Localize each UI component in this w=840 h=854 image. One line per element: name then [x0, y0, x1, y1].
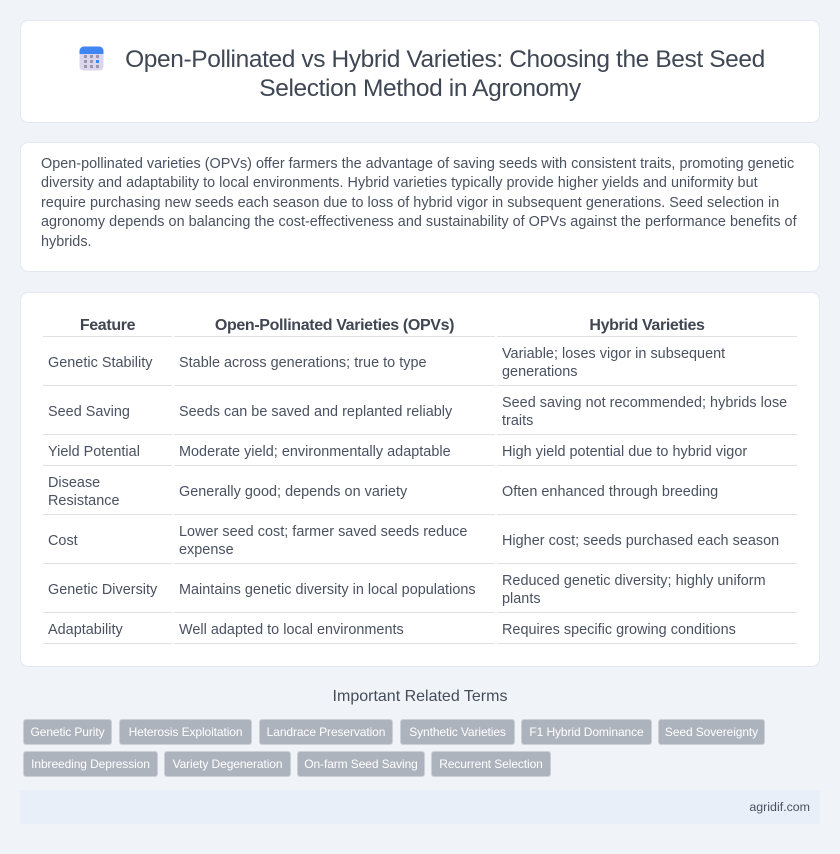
row: Yield Potential	[48, 444, 747, 460]
panel: title header	[20, 20, 820, 123]
row: Yield Potential: Moderate yield; environmentally adaptable	[179, 444, 451, 460]
row: Genetic Diversity: Genetic Diversity	[48, 582, 157, 598]
intro text: diversity and adaptability to local environments. Hybrid varieties typically provide higher yields and uniformity but	[41, 175, 758, 191]
table header: Open-Pollinated Varieties (OPVs)	[215, 317, 454, 334]
row: Genetic Stability: Genetic Stability	[48, 355, 152, 371]
row: Genetic Diversity: Reduced genetic diversity; highly uniform	[502, 573, 766, 589]
row: Disease Resistance: Resistance	[48, 493, 120, 509]
row: Cost: Lower seed cost; farmer saved seeds reduce	[179, 524, 467, 540]
title: Selection Method in Agronomy	[259, 75, 581, 102]
tag list: Inbreeding Depression	[31, 757, 150, 771]
row: Disease Resistance: Often enhanced through breeding	[502, 484, 718, 500]
row: Genetic Diversity: plants	[502, 591, 541, 607]
intro text: require purchasing new seeds each season due to loss of hybrid vigor in subsequent generations. Seed selection in	[41, 195, 779, 211]
intro text	[41, 156, 797, 250]
row: Cost: Higher cost; seeds purchased each season	[502, 533, 779, 549]
tag list: Seed Sovereignty	[665, 725, 758, 739]
tag list: On-farm Seed Saving	[304, 757, 418, 771]
row: Genetic Stability: Stable across generations; true to type	[179, 355, 427, 371]
row: Seed Saving: traits	[502, 413, 533, 429]
intro text: agronomy depends on balancing the cost-effectiveness and sustainability of OPVs against the performance benefits of	[41, 214, 797, 230]
row: Disease Resistance: Generally good; depends on variety	[179, 484, 407, 500]
icon: calendar	[80, 46, 104, 70]
row: Cost: expense	[179, 542, 234, 558]
table header	[80, 317, 705, 334]
row: Adaptability: Requires specific growing conditions	[502, 622, 736, 638]
panel: introduction	[20, 142, 820, 272]
row: Disease Resistance: Disease	[48, 475, 100, 491]
row: Yield Potential: High yield potential due to hybrid vigor	[502, 444, 747, 460]
row: Adaptability: Well adapted to local environments	[179, 622, 404, 638]
footer	[20, 790, 820, 824]
tag list: Heterosis Exploitation	[129, 725, 242, 739]
intro text: Open-pollinated varieties (OPVs) offer farmers the advantage of saving seeds with consistent traits, promoting genetic	[41, 156, 794, 172]
tag list: Landrace Preservation	[267, 725, 385, 739]
title	[125, 46, 765, 102]
footer text: agridif.com	[749, 800, 810, 814]
row: Genetic Stability: generations	[502, 364, 578, 380]
tag list: Recurrent Selection	[439, 757, 543, 771]
row: Seed Saving: Seeds can be saved and replanted reliably	[179, 404, 452, 420]
intro text: hybrids.	[41, 234, 92, 250]
row: Genetic Stability: Variable; loses vigor in subsequent	[502, 346, 725, 362]
table header: Hybrid Varieties	[589, 317, 705, 334]
tag list: Genetic Purity	[31, 725, 104, 739]
title: Open-Pollinated vs Hybrid Varieties: Choosing the Best Seed	[125, 46, 765, 73]
table header: Feature	[80, 317, 135, 334]
row: Seed Saving: Seed saving not recommended; hybrids lose	[502, 395, 787, 411]
row: Cost: Cost	[48, 533, 78, 549]
panel: comparison table	[20, 292, 820, 667]
tag list: F1 Hybrid Dominance	[529, 725, 644, 739]
heading: related terms: Important Related Terms	[333, 688, 507, 705]
tag list: Variety Degeneration	[173, 757, 282, 771]
row: Adaptability	[48, 622, 736, 638]
row: Yield Potential: Yield Potential	[48, 444, 140, 460]
row: Cost	[48, 524, 779, 558]
tag list: Synthetic Varieties	[409, 725, 506, 739]
row: Genetic Stability	[48, 346, 726, 380]
row: Seed Saving	[48, 395, 787, 429]
tag list	[23, 719, 765, 777]
row: Seed Saving: Seed Saving	[48, 404, 130, 420]
row: Disease Resistance	[48, 475, 718, 509]
row: Genetic Diversity: Maintains genetic diversity in local populations	[179, 582, 476, 598]
row: Genetic Diversity	[48, 573, 766, 607]
row: Adaptability: Adaptability	[48, 622, 123, 638]
